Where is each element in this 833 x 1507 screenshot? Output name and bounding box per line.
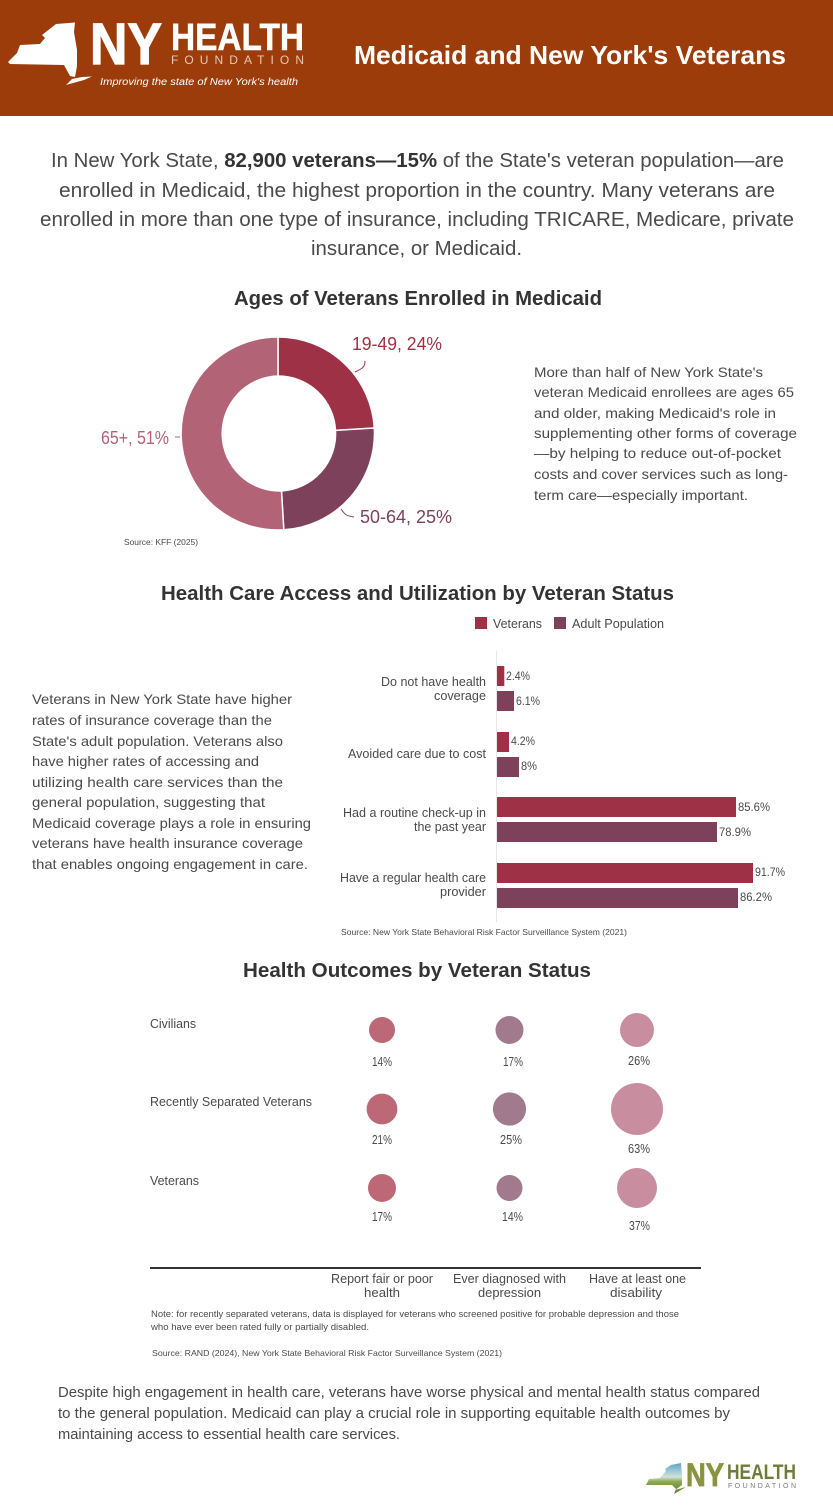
row: recently separated veterans: Recently Separated Veterans <box>150 1094 312 1109</box>
text block: access explanation: utilizing health care services than the <box>32 774 283 790</box>
row: civilians: Civilians <box>150 1016 196 1031</box>
text block: ages explanation: supplementing other forms of coverage <box>534 425 797 441</box>
intro text: insurance, or Medicaid. <box>311 238 522 260</box>
header banner <box>0 0 833 116</box>
category: routine check-up: Had a routine check-up in <box>343 805 486 820</box>
category: no coverage <box>381 666 540 711</box>
column labels <box>331 1271 686 1300</box>
source: Source: RAND (2024), New York State Behavioral Risk Factor Surveillance System (2021) <box>152 1348 502 1358</box>
text block: access explanation <box>32 691 311 872</box>
note <box>150 1309 679 1332</box>
row: civilians: 14% <box>372 1055 392 1069</box>
intro text: enrolled in Medicaid, the highest proportion in the country. Many veterans are <box>59 180 775 202</box>
logo wordmark: Improving the state of New York's health <box>100 77 298 88</box>
heading: outcomes: Health Outcomes by Veteran Status <box>243 960 591 982</box>
text block: access explanation: Medicaid coverage plays a role in ensuring <box>32 815 311 831</box>
source: Source: KFF (2025) <box>124 537 198 547</box>
legend: Adult Population <box>572 616 664 631</box>
text block: ages explanation: term care—especially important. <box>534 487 748 503</box>
legend <box>475 616 664 631</box>
row: recently separated veterans: 25% <box>500 1133 522 1147</box>
source: Source: New York State Behavioral Risk Factor Surveillance System (2021) <box>341 927 627 937</box>
column labels: Have at least one <box>589 1271 686 1286</box>
category: regular provider: Have a regular health care <box>340 870 486 885</box>
text block: ages explanation: veteran Medicaid enrollees are ages 65 <box>534 384 794 400</box>
footer logo <box>646 1457 796 1494</box>
text block: ages explanation <box>534 364 797 503</box>
text block: closing: to the general population. Medicaid can play a crucial role in supporting equitable health outcomes by <box>58 1406 731 1422</box>
label: 19-49 <box>352 333 442 372</box>
label: 19-49: 19-49, 24% <box>352 333 442 354</box>
text block: access explanation: State's adult population. Veterans also <box>32 733 283 749</box>
footer logo: NY <box>686 1457 724 1493</box>
column labels: Report fair or poor <box>331 1271 434 1286</box>
row: veterans: Veterans <box>150 1173 199 1188</box>
heading: access: Health Care Access and Utilization by Veteran Status <box>161 583 674 605</box>
text block: ages explanation: —by helping to reduce out-of-pocket <box>534 445 781 461</box>
text block: closing <box>58 1385 760 1443</box>
logo wordmark <box>90 12 304 88</box>
category: routine check-up: the past year <box>414 819 487 834</box>
bar chart: access <box>340 651 785 937</box>
category: no coverage: 2.4% <box>506 669 530 683</box>
heading: ages: Ages of Veterans Enrolled in Medicaid <box>234 288 602 310</box>
category: no coverage: coverage <box>434 688 486 703</box>
text block: ages explanation: costs and cover services such as long- <box>534 466 788 482</box>
category: regular provider <box>340 863 785 908</box>
category: avoided care <box>348 732 537 777</box>
row: civilians: 26% <box>628 1054 650 1068</box>
category: routine check-up: 78.9% <box>719 825 751 839</box>
category: routine check-up <box>343 797 770 842</box>
category: regular provider: provider <box>440 884 487 899</box>
category: regular provider: 91.7% <box>755 865 785 879</box>
text block: closing: Despite high engagement in health care, veterans have worse physical and mental health status compared <box>58 1385 760 1401</box>
row: civilians: 17% <box>503 1055 523 1069</box>
logo wordmark: NY <box>90 12 162 77</box>
segment: 50-64 <box>282 428 374 530</box>
icon: state with landscape <box>646 1463 686 1494</box>
text block: access explanation: general population, suggesting that <box>32 794 265 810</box>
row: recently separated veterans <box>150 1083 663 1156</box>
text block: access explanation: Veterans in New York State have higher <box>32 691 292 707</box>
row: veterans: 37% <box>629 1219 650 1233</box>
category: regular provider: 86.2% <box>740 890 772 904</box>
label: 50-64: 50-64, 25% <box>360 506 452 527</box>
logo wordmark: FOUNDATIO N <box>171 53 304 67</box>
column labels: depression <box>478 1285 541 1300</box>
icon: New York State silhouette <box>8 22 92 85</box>
text block: access explanation: veterans have health insurance coverage <box>32 835 303 851</box>
category: no coverage: Do not have health <box>381 674 486 689</box>
column labels: disability <box>610 1285 663 1300</box>
row: veterans <box>150 1168 657 1233</box>
row: veterans: 17% <box>372 1210 392 1224</box>
category: no coverage: 6.1% <box>516 694 540 708</box>
text block: access explanation: have higher rates of accessing and <box>32 753 259 769</box>
footer logo: FOUNDATION <box>728 1483 796 1490</box>
donut chart <box>101 333 452 547</box>
note: who have ever been rated fully or partially disabled. <box>150 1322 369 1332</box>
row: recently separated veterans: 21% <box>372 1133 392 1147</box>
category: avoided care: 8% <box>521 759 537 773</box>
category: avoided care: Avoided care due to cost <box>348 746 486 761</box>
text block: access explanation: that enables ongoing engagement in care. <box>32 856 308 872</box>
text block: ages explanation: and older, making Medicaid's role in <box>534 405 776 421</box>
column labels: Ever diagnosed with <box>453 1271 566 1286</box>
note: Note: for recently separated veterans, data is displayed for veterans who screened positive for probable depression and those <box>151 1309 679 1319</box>
row: recently separated veterans: 63% <box>628 1142 650 1156</box>
category: routine check-up: 85.6% <box>738 800 770 814</box>
category: avoided care: 4.2% <box>511 734 535 748</box>
text block: access explanation: rates of insurance coverage than the <box>32 712 272 728</box>
column labels: health <box>364 1285 400 1300</box>
text block: ages explanation: More than half of New York State's <box>534 364 763 380</box>
intro text <box>40 150 794 260</box>
segment: 19-49 <box>278 337 374 430</box>
bubble chart: outcomes <box>150 1013 701 1300</box>
legend: Veterans <box>493 616 542 631</box>
row: civilians <box>150 1013 654 1069</box>
intro text: enrolled in more than one type of insurance, including TRICARE, Medicare, private <box>40 209 794 231</box>
segment: 65+ <box>181 337 284 530</box>
title: Medicaid and New York's Veterans <box>354 40 786 70</box>
row: veterans: 14% <box>502 1210 523 1224</box>
label: 65+: 65+, 51% <box>101 427 169 448</box>
intro text: In New York State, 82,900 veterans—15% of the State's veteran population—are <box>51 150 784 172</box>
logo wordmark: HEALTH <box>171 17 304 59</box>
text block: closing: maintaining access to essential health care services. <box>58 1427 400 1443</box>
footer logo: HEALTH <box>727 1461 796 1484</box>
